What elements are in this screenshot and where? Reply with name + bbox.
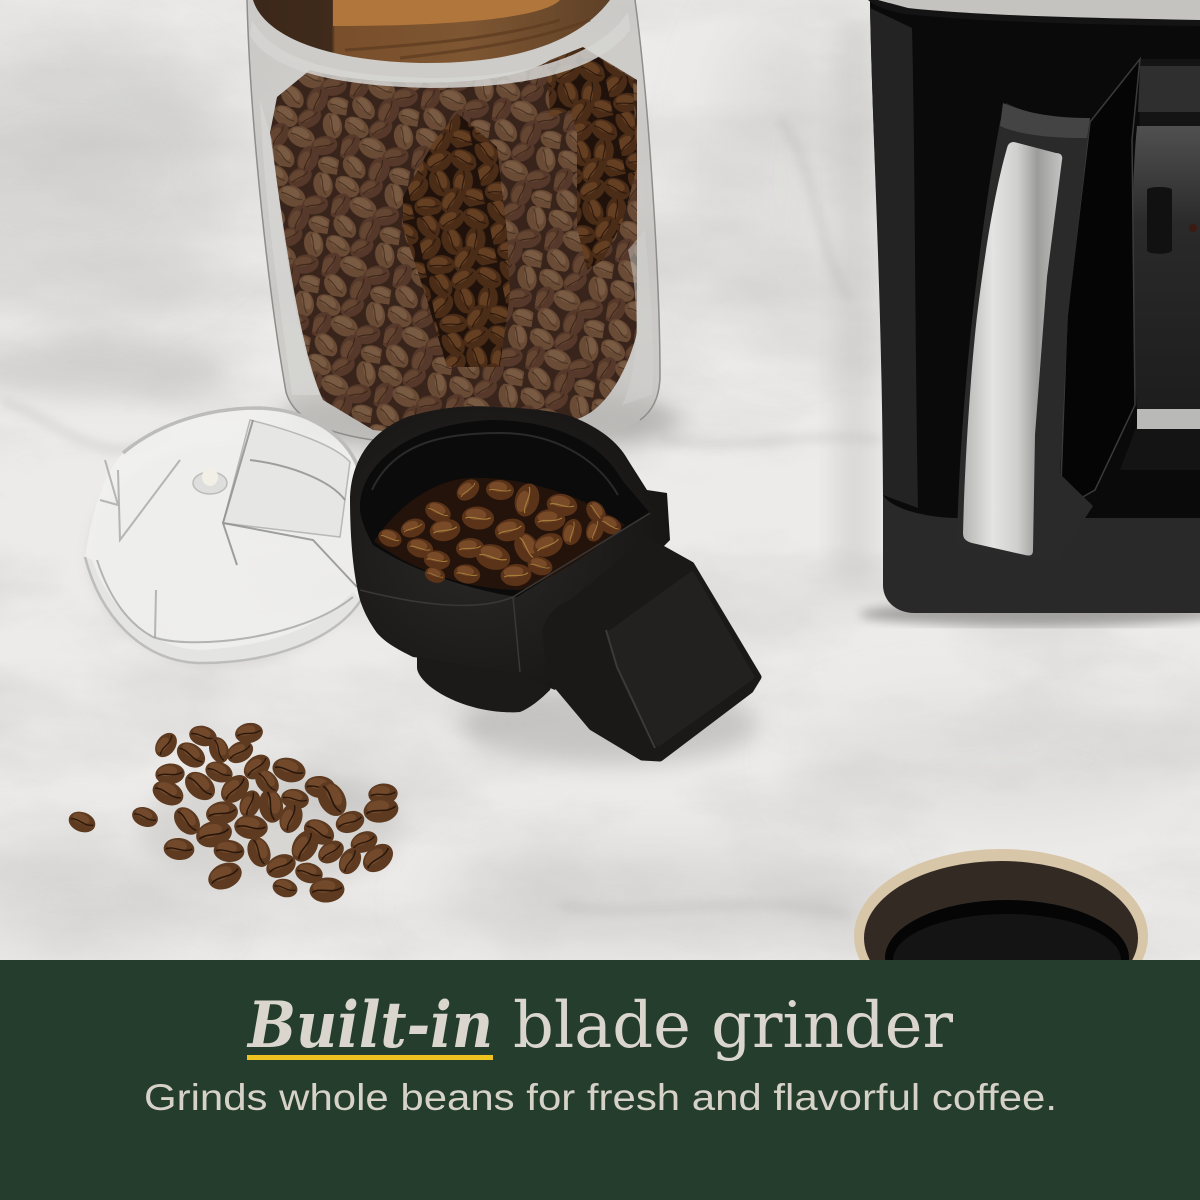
drip coffee maker: [835, 0, 1200, 626]
title: Built-in: [246, 988, 493, 1063]
machine body: [870, 0, 1200, 520]
glass rim: [250, 12, 630, 88]
discharge spout: [546, 541, 758, 758]
carafe handle frame: [1060, 59, 1140, 510]
hopper base foot: [417, 655, 560, 712]
carafe glass: [1100, 59, 1200, 518]
bean mass: [270, 47, 637, 432]
dark right strip: [547, 47, 637, 270]
hopper cup body: [350, 406, 670, 690]
acacia wood lid: [253, 0, 610, 63]
base: [883, 495, 1200, 613]
dark reflection window: [403, 113, 510, 367]
lid knob: [193, 468, 227, 494]
beans inside hopper: [374, 475, 625, 590]
subtitle: Grinds whole beans for fresh and flavorful coffee.: [144, 1077, 1057, 1118]
grinder hopper: [350, 406, 760, 765]
title: [246, 988, 953, 1063]
green caption banner: [0, 960, 1200, 1200]
top steel trim: [868, 0, 1200, 26]
glass body: [247, 0, 660, 445]
lid wing: [223, 420, 350, 537]
title: blade grinder: [513, 989, 953, 1063]
scattered coffee beans: [66, 721, 400, 904]
transparent hopper lid: [85, 408, 363, 667]
marble countertop background: [0, 0, 1200, 960]
hopper interior: [360, 420, 650, 597]
yellow underline: [247, 1055, 493, 1060]
stainless handle plate: [963, 142, 1062, 555]
coffee cup: [854, 849, 1148, 1023]
glass highlights: [260, 100, 320, 395]
glass jar of coffee beans: [247, 0, 680, 454]
